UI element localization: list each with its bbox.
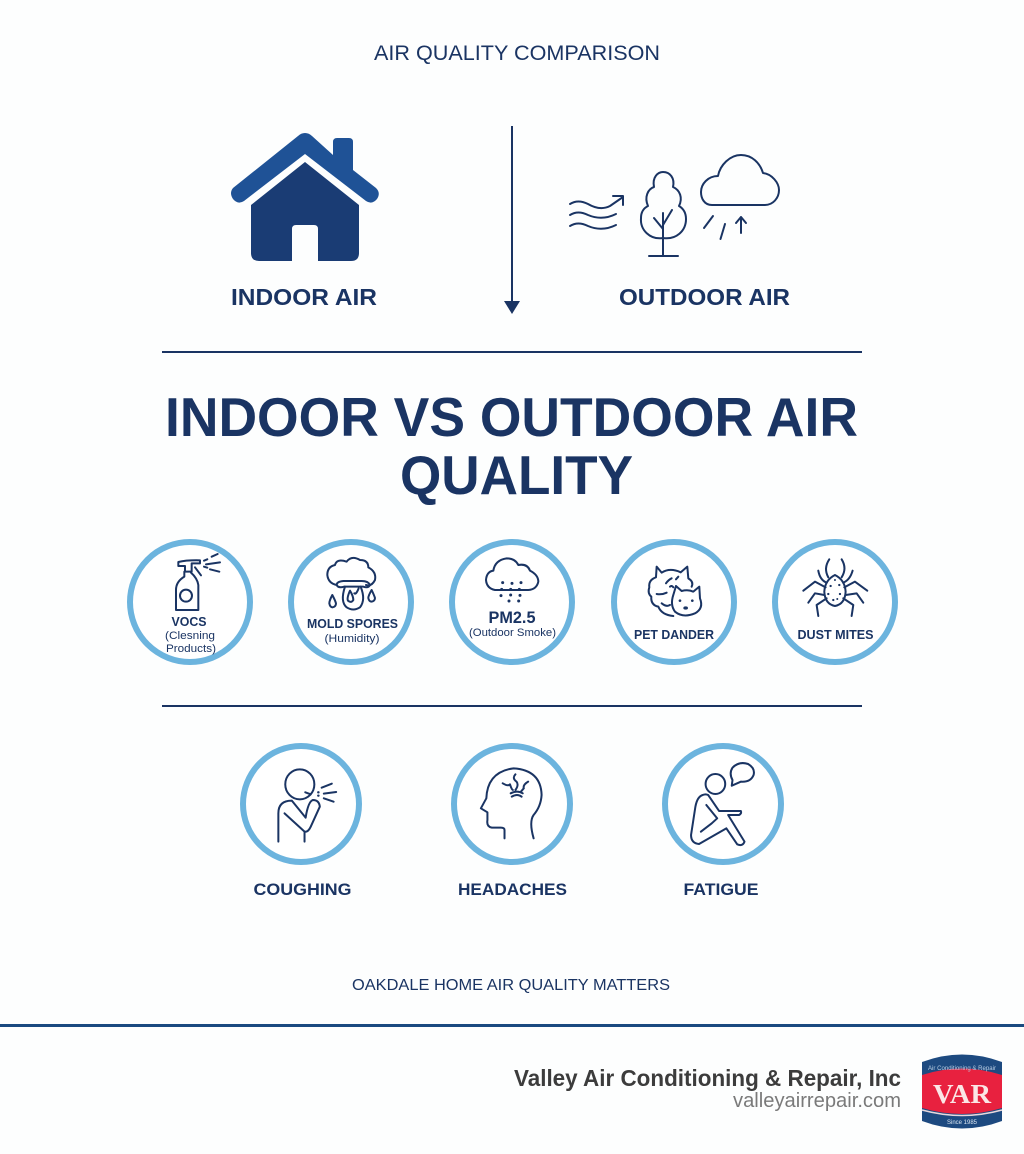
icon: outdoor wind, tree and cloud (570, 155, 779, 256)
arrow: vertical divider (504, 126, 520, 314)
badge: dust mites (775, 542, 895, 662)
label: PM2.5: PM2.5 (488, 609, 536, 627)
symptom: coughing (243, 746, 359, 899)
label: coughing: COUGHING (254, 880, 352, 899)
footer website: valleyairrepair.com (733, 1090, 901, 1112)
icon: cat and dander cloud (505, 530, 701, 616)
label: cleaning products: (Clesning (165, 630, 215, 642)
footer company name: Valley Air Conditioning & Repair, Inc (514, 1065, 901, 1091)
label: outdoor smoke: (Outdoor Smoke) (469, 627, 556, 639)
outdoor air label: OUTDOOR AIR (619, 284, 790, 310)
top heading: AIR QUALITY COMPARISON (374, 42, 660, 65)
symptom: headaches (454, 746, 570, 899)
label: humidity: (Humidity) (324, 633, 380, 645)
logo: VAR badge: Since 1985 (947, 1120, 978, 1126)
icon: dust mite (803, 559, 867, 616)
main title: INDOOR VS OUTDOOR AIR (165, 386, 858, 448)
main title: QUALITY (400, 444, 633, 506)
tagline: OAKDALE HOME AIR QUALITY MATTERS (352, 977, 670, 994)
icon: coughing person (278, 769, 336, 842)
badge: PM2.5 (452, 542, 572, 662)
icon: seated tired person with speech bubble (691, 763, 754, 845)
icon: head with pain lines (481, 768, 542, 838)
symptom: fatigue (665, 746, 781, 899)
badge: VOCs (130, 542, 250, 662)
icon: mold mushroom (327, 558, 375, 609)
badge: mold spores (291, 542, 411, 662)
indoor air label: INDOOR AIR (231, 284, 377, 310)
label: dust mites: DUST MITES (798, 627, 874, 642)
icon: spray bottle (176, 554, 220, 610)
label: fatigue: FATIGUE (684, 880, 758, 899)
label: headaches: HEADACHES (458, 880, 567, 899)
icon: smoke cloud (486, 558, 538, 602)
icon: house (231, 133, 379, 261)
badge: pet dander (505, 530, 734, 662)
logo: VAR badge (922, 1054, 1002, 1128)
label: mold spores: MOLD SPORES (307, 616, 398, 631)
label: products: Products) (166, 643, 216, 655)
label: pet dander: PET DANDER (634, 627, 715, 642)
main title (165, 386, 858, 506)
logo: VAR badge: Air Conditioning & Repair (928, 1066, 996, 1072)
logo: VAR badge: VAR (933, 1079, 992, 1109)
label: VOCs: VOCS (172, 614, 207, 629)
